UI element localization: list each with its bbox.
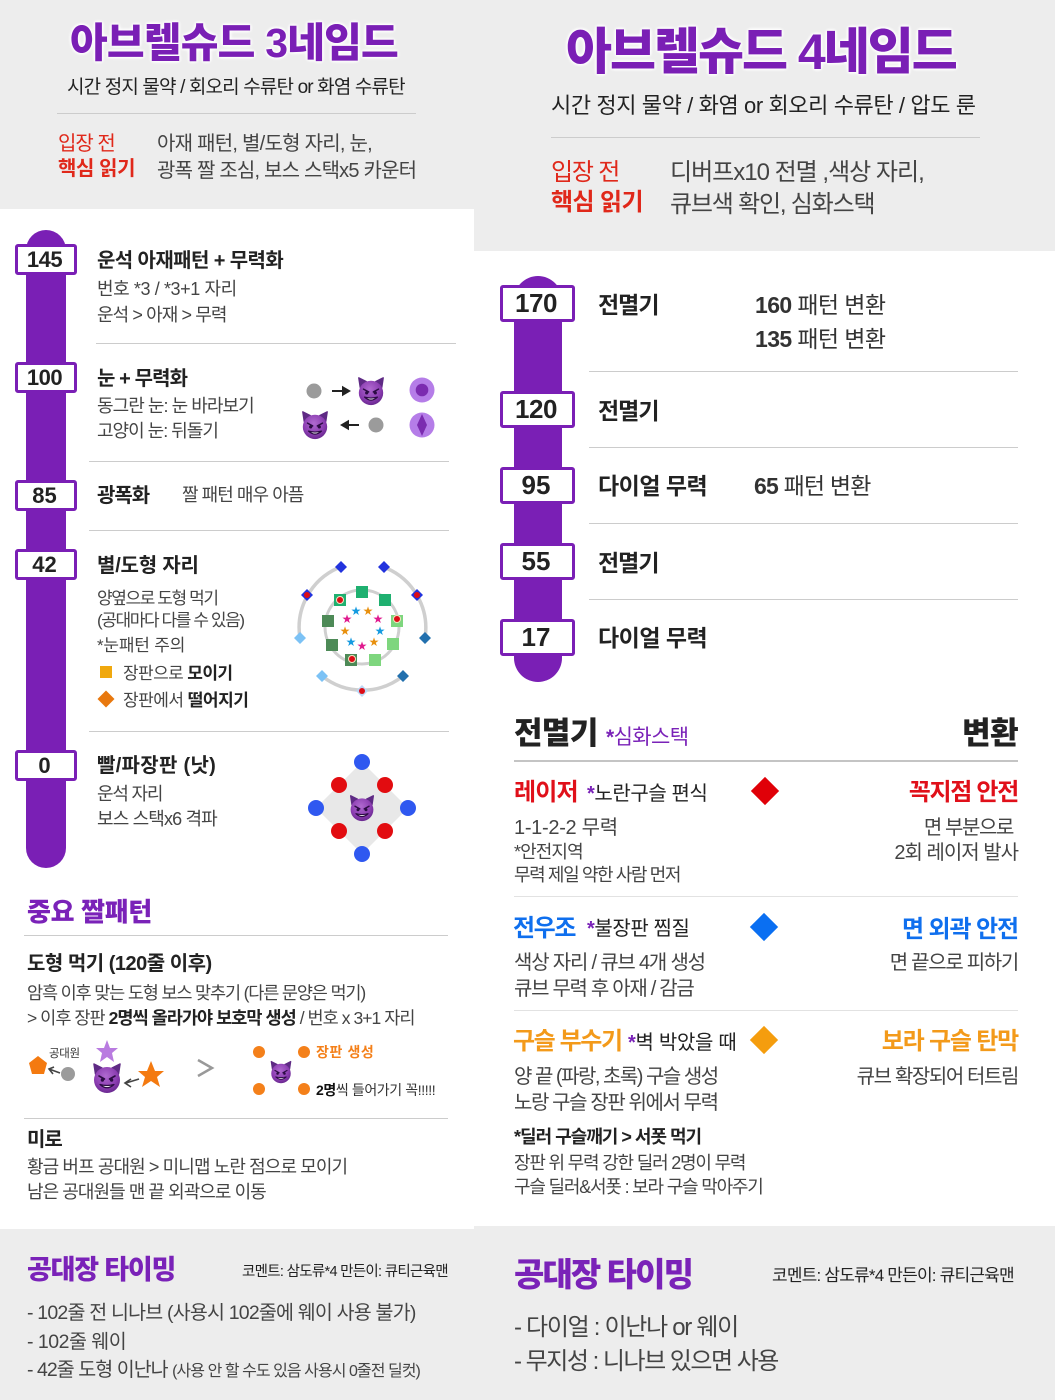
- diagram: four orange puddles: [253, 1046, 310, 1095]
- timeline bar: left: [26, 230, 66, 868]
- title: 3 named: 아브렐슈드 3네임드: [70, 20, 398, 66]
- hp marker 55: 55: [522, 546, 550, 576]
- panel: right footer background: [474, 1226, 1055, 1400]
- text: right credit: 코멘트: 삼도류*4 만든이: 큐티근육맨: [772, 1266, 1014, 1285]
- text: 135 pattern change: 135 패턴 변환: [755, 326, 885, 352]
- heading: eat shapes: 도형 먹기 (120줄 이후): [27, 953, 212, 975]
- text: 65 pattern change: 65 패턴 변환: [754, 473, 871, 499]
- heading: laser: 레이저: [514, 779, 578, 806]
- text: pre-entry checklist line 1: 아재 패턴, 별/도형 자리, 눈,: [157, 133, 372, 155]
- subtitle: 3 named: 시간 정지 물약 / 회오리 수류탄 or 화염 수류탄: [67, 77, 405, 98]
- diagram: star and shape positions: ★: [357, 639, 367, 653]
- panel: left header background: [0, 0, 475, 209]
- text: dodge to edge: 면 끝으로 피하기: [890, 952, 1018, 974]
- heading: purple orb barrage: 보라 구슬 탄막: [882, 1028, 1018, 1055]
- text: laser note: *노란구슬 편식: [587, 783, 708, 805]
- heading: dealer orb note: *딜러 구슬깨기 > 서폿 먹기: [514, 1127, 701, 1147]
- text: core reading label: 핵심 읽기: [58, 158, 135, 180]
- diagram: star and shape positions: [294, 561, 431, 697]
- heading: left raid leader timing: 공대장 타이밍: [27, 1255, 175, 1285]
- text: raid member label: 공대원: [49, 1048, 80, 1060]
- text: orb note: *벽 박았을 때: [628, 1032, 736, 1054]
- text: deep stack note: *심화스택: [606, 726, 688, 749]
- heading: vertex safe: 꼭지점 안전: [909, 779, 1018, 806]
- text: pre-entry checklist right line 1: 디버프x10 전멸 ,색상 자리,: [670, 159, 924, 186]
- text: maze line 2: 남은 공대원들 맨 끝 외곽으로 이동: [27, 1182, 266, 1202]
- text: pre-entry checklist line 2: 광폭 짤 조심, 보스 스택x5 카운터: [157, 160, 416, 182]
- heading: 0 phase: 빨/파장판 (낫): [97, 755, 216, 777]
- diagram: star and shape positions: ★: [342, 612, 352, 626]
- text: wipe 120: 전멸기: [598, 398, 658, 424]
- heading: 145 phase: 운석 아재패턴 + 무력화: [97, 250, 283, 272]
- hp marker 100: [15, 362, 77, 393]
- heading: orb break: 구슬 부수기: [513, 1028, 622, 1055]
- text: timing line 3: - 42줄 도형 이난나 (사용 안 할 수도 있음 사용시 0줄전 딜컷): [27, 1359, 420, 1381]
- text: dealer orb line 2: 구슬 딜러&서폿 : 보라 구슬 막아주기: [514, 1177, 763, 1197]
- hp marker 0: [15, 750, 77, 781]
- text: 0 detail line 2: 보스 스택x6 격파: [97, 809, 217, 829]
- text: pre-entry label right: 입장 전: [551, 159, 619, 186]
- panel: left footer background: [0, 1229, 475, 1400]
- hp marker 145: 145: [27, 247, 62, 272]
- diagram: star and shape positions: ★: [373, 612, 383, 626]
- text: step off puddle: 장판에서 떨어지기: [123, 691, 248, 710]
- heading: right raid leader timing: 공대장 타이밍: [514, 1256, 692, 1293]
- text: two lasers: 2회 레이저 발사: [894, 842, 1018, 864]
- text: pre-entry label: 입장 전: [58, 133, 115, 155]
- text: 42 detail line 2: (공대마다 다를 수 있음): [97, 611, 244, 630]
- heading: 100 phase: 눈 + 무력화: [97, 368, 187, 390]
- text: eat shapes line 2: > 이후 장판 2명씩 올라가야 보호막 생성 / 번호 x 3+1 자리: [27, 1008, 414, 1028]
- hp marker 170: 170: [515, 288, 557, 318]
- heading: important add patterns: 중요 짤패턴: [27, 897, 152, 927]
- text: gather on puddle: 장판으로 모이기: [123, 664, 232, 683]
- text: pre-entry checklist right line 2: 큐브색 확인, 심화스택: [670, 191, 874, 218]
- hp marker 17: [500, 619, 575, 656]
- heading: transformation: 변환: [962, 716, 1018, 751]
- hp marker 42: [15, 549, 77, 580]
- diagram: star and shape positions: ★: [340, 624, 350, 638]
- text: 145 order: 운석 > 아재 > 무력: [97, 305, 227, 325]
- hp marker 95: [500, 467, 575, 504]
- text: cube expands: 큐브 확장되어 터트림: [857, 1066, 1018, 1088]
- subtitle: 4 named: 시간 정지 물약 / 화염 or 회오리 수류탄 / 압도 룬: [551, 93, 976, 118]
- icon: red diamond: [751, 777, 779, 805]
- hp marker 85: 85: [32, 483, 57, 508]
- hp marker 17: 17: [522, 622, 550, 652]
- text: safe zone: *안전지역: [514, 842, 583, 862]
- diagram: shape eating flow: [29, 1040, 214, 1093]
- hp marker 120: [500, 391, 575, 428]
- text: 160 pattern change: 160 패턴 변환: [755, 292, 885, 318]
- text: yellow orb stagger: 노랑 구슬 장판 위에서 무력: [514, 1092, 718, 1114]
- hp marker 0: 0: [38, 753, 51, 778]
- hp marker 42: 42: [32, 552, 57, 577]
- diagram: star and shape positions: ★: [369, 635, 379, 649]
- heading: 85 phase: 광폭화: [97, 485, 149, 507]
- diagram: star and shape positions: ★: [346, 635, 356, 649]
- heading: 42 phase: 별/도형 자리: [97, 555, 199, 577]
- text: face part: 면 부분으로: [924, 817, 1013, 839]
- diagram: star and shape positions: ★: [351, 604, 361, 618]
- icon: eye pattern diagram: [302, 377, 434, 440]
- heading: outer face safe: 면 외곽 안전: [902, 916, 1018, 943]
- text: core reading label right: 핵심 읽기: [551, 189, 643, 216]
- title: 4 named: 아브렐슈드 4네임드: [566, 24, 956, 80]
- icon: orange diamond: [98, 691, 114, 707]
- text: 145 detail: 번호 *3 / *3+1 자리: [97, 279, 237, 299]
- text: dealer orb line 1: 장판 위 무력 강한 딜러 2명이 무력: [514, 1153, 745, 1173]
- hp marker 85: [15, 480, 77, 511]
- text: 0 detail line 1: 운석 자리: [97, 784, 162, 804]
- text: cube stagger: 큐브 무력 후 아재 / 감금: [514, 978, 693, 1000]
- text: 42 detail line 1: 양옆으로 도형 먹기: [97, 589, 218, 608]
- hp marker 170: [500, 285, 575, 322]
- text: wipe 55: 전멸기: [598, 550, 658, 576]
- text: puddle created: 장판 생성: [316, 1044, 374, 1060]
- hp marker 55: [500, 543, 575, 580]
- panel: right header background: [474, 0, 1055, 251]
- text: round eye: 동그란 눈: 눈 바라보기: [97, 396, 254, 416]
- text: front line note: *불장판 찜질: [587, 918, 690, 940]
- text: color spot: 색상 자리 / 큐브 4개 생성: [514, 952, 705, 974]
- hp marker 120: 120: [515, 394, 557, 424]
- text: right timing line 2: - 무지성 : 니나브 있으면 사용: [514, 1348, 778, 1375]
- hp marker 95: 95: [522, 470, 550, 500]
- text: left credit: 코멘트: 삼도류*4 만든이: 큐티근육맨: [242, 1264, 448, 1280]
- text: cat eye: 고양이 눈: 뒤돌기: [97, 421, 218, 441]
- text: weakest first: 무력 제일 약한 사람 먼저: [514, 865, 680, 885]
- hp marker 145: [15, 244, 77, 275]
- diagram: star and shape positions: ★: [363, 604, 373, 618]
- text: dial 95: 다이얼 무력: [598, 473, 707, 499]
- diagram: red and blue puddles: [308, 754, 416, 862]
- text: wipe 170: 전멸기: [598, 292, 658, 318]
- text: dial 17: 다이얼 무력: [598, 625, 707, 651]
- text: two must enter: 2명씩 들어가기 꼭!!!!!: [316, 1082, 435, 1098]
- text: timing line 1: - 102줄 전 니나브 (사용시 102줄에 웨이 사용 불가): [27, 1302, 416, 1324]
- text: 42 detail line 3: *눈패턴 주의: [97, 636, 185, 655]
- text: maze line 1: 황금 버프 공대원 > 미니맵 노란 점으로 모이기: [27, 1157, 347, 1177]
- icon: orange diamond large: [750, 1026, 778, 1054]
- text: right timing line 1: - 다이얼 : 이난나 or 웨이: [514, 1314, 738, 1341]
- heading: front line: 전우조: [513, 915, 575, 942]
- text: 85 detail: 짤 패턴 매우 아픔: [182, 485, 303, 505]
- text: timing line 2: - 102줄 웨이: [27, 1331, 126, 1353]
- text: eat shapes line 1: 암흑 이후 맞는 도형 보스 맞추기 (다른 문양은 먹기): [27, 983, 365, 1003]
- icon: blue diamond: [750, 913, 778, 941]
- icon: yellow square: [100, 666, 112, 678]
- hp marker 100: 100: [27, 365, 62, 390]
- text: laser stagger: 1-1-2-2 무력: [514, 817, 618, 839]
- timeline bar: right: [514, 276, 562, 682]
- diagram: star and shape positions: ★: [375, 624, 385, 638]
- text: orbs spawn: 양 끝 (파랑, 초록) 구슬 생성: [514, 1066, 718, 1088]
- heading: maze: 미로: [27, 1129, 62, 1151]
- heading: wipe mechanics: 전멸기: [514, 716, 598, 751]
